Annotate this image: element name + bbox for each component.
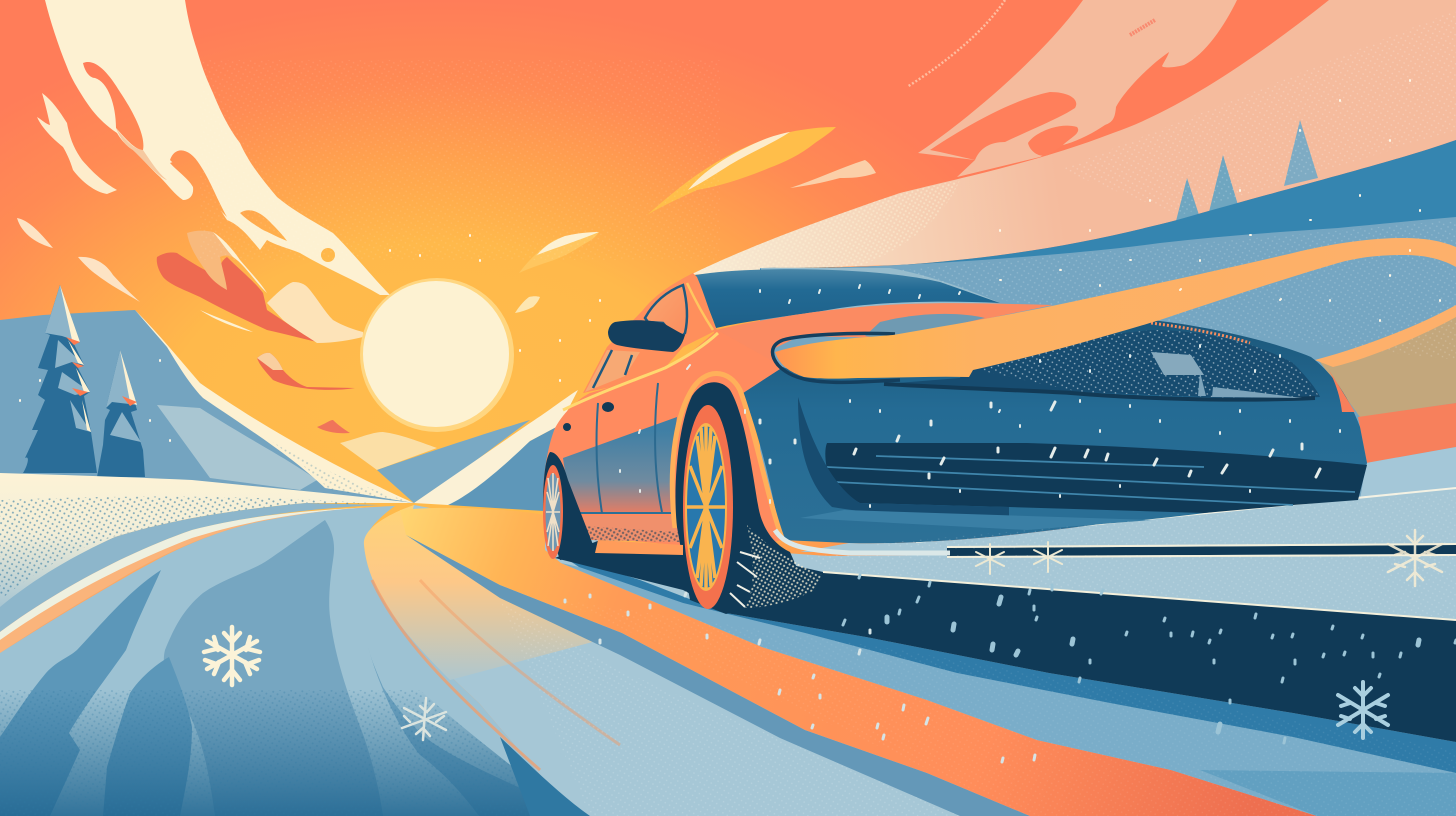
snowflake, lower left	[204, 627, 260, 685]
grille	[825, 443, 1367, 513]
wheel arch highlight	[672, 373, 782, 538]
falling snow specks on the sky and hills	[20, 80, 1440, 441]
left road lane	[0, 506, 575, 816]
darker blue band	[561, 555, 1456, 773]
right road surface	[364, 505, 1456, 816]
hood halftone panel	[885, 330, 1320, 398]
pale yellow glow on the road	[364, 505, 620, 770]
falling snow specks on the car	[620, 285, 1340, 507]
hood badge	[1151, 352, 1204, 375]
snowflake, right edge	[1388, 530, 1442, 586]
small pine	[97, 350, 145, 477]
rear wheel arch	[543, 452, 597, 560]
main cream cloud swoosh	[45, 0, 390, 295]
orange strip under the car	[595, 540, 683, 555]
car front body	[743, 320, 1367, 543]
rear tyre	[543, 465, 563, 559]
side mirror	[608, 320, 685, 352]
blue band between snow bank and shoulder	[0, 503, 380, 653]
lighter blue band above the orange stripe	[561, 563, 1456, 816]
road bottom shading	[0, 690, 575, 816]
belt line highlight	[563, 333, 718, 410]
tyre spray streaks	[730, 552, 760, 607]
peach sky band, upper right	[690, 0, 1456, 275]
dark navy stripe	[555, 540, 1456, 742]
door seams	[597, 383, 662, 513]
blue hill wedge and snow ray beyond the road	[377, 390, 578, 512]
rear rim	[546, 473, 560, 551]
door lower blue panel	[563, 417, 677, 513]
orange stripe on the road	[400, 508, 1317, 816]
front window	[645, 285, 687, 338]
blue hills, right	[760, 140, 1456, 500]
wheel arch dark	[675, 382, 800, 614]
pale snow strips right of the car	[800, 488, 1456, 620]
orange shoulder line	[0, 506, 390, 655]
door handles	[563, 402, 614, 431]
snowflake, lower right	[1338, 682, 1388, 738]
car	[543, 269, 1367, 614]
large pine	[23, 285, 97, 473]
front rim spokes	[687, 425, 725, 589]
wheel ruts	[164, 520, 383, 816]
small cream cloud wisps, upper left	[17, 93, 140, 302]
grille slats	[827, 456, 1355, 505]
pine trees on the left	[23, 285, 145, 477]
tyre spray halftone	[745, 525, 822, 608]
yellow and cream wisps right of the sun	[515, 127, 876, 313]
rear windows	[585, 350, 640, 392]
rocker panel	[565, 497, 680, 542]
car side body	[543, 330, 783, 545]
lower lip	[800, 510, 1151, 530]
left snow bank	[0, 473, 414, 610]
small cream hill behind the road	[340, 432, 437, 470]
blue edge beside the orange stripe	[406, 535, 1030, 816]
right corner light	[1329, 370, 1355, 412]
small snowflakes by the bumper	[976, 542, 1062, 574]
headlight outline	[773, 333, 900, 382]
fender and hood strip	[700, 303, 1053, 393]
bumper snow edge	[775, 530, 950, 553]
front tyre	[683, 405, 733, 609]
front rim	[685, 423, 727, 591]
falling snow specks on the road	[565, 575, 1456, 762]
greenhouse pillars	[583, 273, 717, 393]
orange ribbon trail	[775, 238, 1456, 379]
intake crescent	[798, 397, 1009, 518]
sun	[360, 278, 514, 432]
car roof	[695, 269, 1000, 328]
left mountain with snow slope	[0, 310, 414, 503]
yellow rim on pillar	[687, 283, 713, 330]
red and cream clouds near the sun	[157, 231, 363, 433]
distant pine trees, upper right	[1176, 120, 1318, 221]
snowflake, lower centre	[402, 698, 446, 740]
